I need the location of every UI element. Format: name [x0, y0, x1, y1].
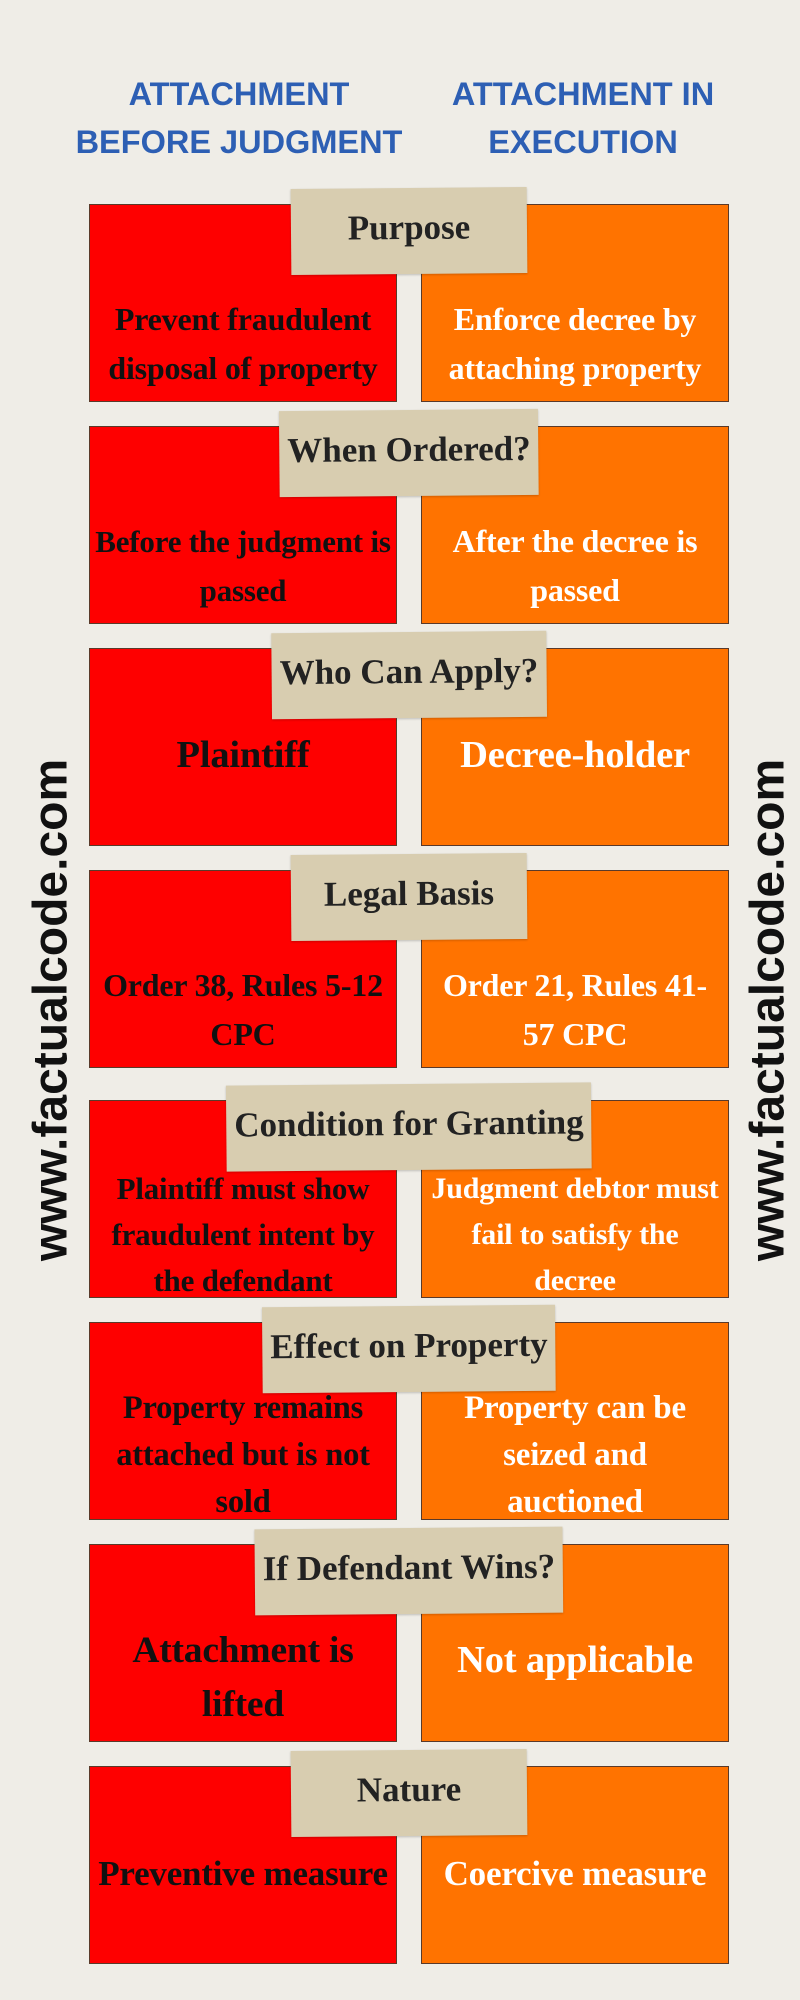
row: effect: auctioned	[507, 1484, 643, 1520]
row: condition: fraudulent intent by	[112, 1217, 374, 1252]
row: purpose: attaching property	[449, 350, 701, 386]
row: condition	[89, 1082, 729, 1298]
row: purpose: Enforce decree by	[454, 301, 696, 337]
heading: in execution	[452, 76, 714, 160]
row: when ordered: When Ordered?	[287, 429, 531, 470]
row: purpose: Purpose	[348, 207, 470, 248]
watermark left: www.factualcode.com	[24, 759, 78, 1261]
row: legal basis	[89, 853, 729, 1068]
row: defendant wins: Not applicable	[457, 1638, 693, 1680]
row: defendant wins: Attachment is	[132, 1630, 354, 1671]
row: condition: Judgment debtor must	[431, 1172, 719, 1205]
row: effect: Property remains	[123, 1390, 363, 1426]
heading: in execution: ATTACHMENT IN	[452, 76, 714, 112]
row: condition: Condition for Granting	[234, 1102, 584, 1145]
row: effect: sold	[215, 1484, 271, 1520]
row: effect: Effect on Property	[270, 1325, 548, 1366]
row: defendant wins	[89, 1526, 729, 1742]
row: nature: Coercive measure	[444, 1854, 706, 1892]
row: when ordered: Before the judgment is	[95, 524, 391, 559]
row: condition: decree	[534, 1264, 616, 1297]
row: defendant wins: If Defendant Wins?	[263, 1547, 555, 1588]
row: who can apply	[89, 630, 729, 846]
row: nature: Nature	[357, 1770, 461, 1809]
row: condition: the defendant	[153, 1263, 333, 1298]
heading: before judgment: ATTACHMENT	[129, 76, 349, 112]
row: condition: fail to satisfy the	[471, 1218, 678, 1251]
row: effect: Property can be	[464, 1390, 686, 1426]
row: defendant wins: lifted	[202, 1684, 284, 1725]
row: purpose: disposal of property	[108, 350, 378, 386]
row: legal basis: Order 21, Rules 41-	[443, 967, 707, 1003]
row: when ordered: passed	[200, 573, 286, 608]
row: who can apply: Who Can Apply?	[279, 651, 538, 692]
row: effect	[89, 1304, 729, 1520]
row: who can apply: Plaintiff	[177, 734, 309, 776]
row: when ordered: After the decree is	[453, 523, 697, 559]
row: purpose	[89, 187, 729, 402]
row: effect: seized and	[503, 1436, 647, 1472]
row: nature: Preventive measure	[98, 1854, 388, 1892]
row: legal basis: Legal Basis	[324, 873, 494, 914]
row: effect: attached but is not	[116, 1436, 370, 1472]
heading: before judgment: BEFORE JUDGMENT	[76, 124, 402, 160]
row: condition: Plaintiff must show	[117, 1171, 369, 1206]
watermark right: www.factualcode.com	[742, 759, 794, 1261]
row: nature	[89, 1749, 729, 1964]
row: legal basis: CPC	[210, 1016, 276, 1052]
row: legal basis: 57 CPC	[523, 1016, 627, 1052]
heading: before judgment	[76, 76, 402, 160]
row: when ordered	[89, 408, 729, 624]
row: who can apply: Decree-holder	[460, 734, 690, 776]
row: purpose: Prevent fraudulent	[115, 301, 371, 337]
heading: in execution: EXECUTION	[488, 124, 678, 160]
row: when ordered: passed	[530, 572, 620, 608]
row: legal basis: Order 38, Rules 5-12	[103, 967, 383, 1003]
